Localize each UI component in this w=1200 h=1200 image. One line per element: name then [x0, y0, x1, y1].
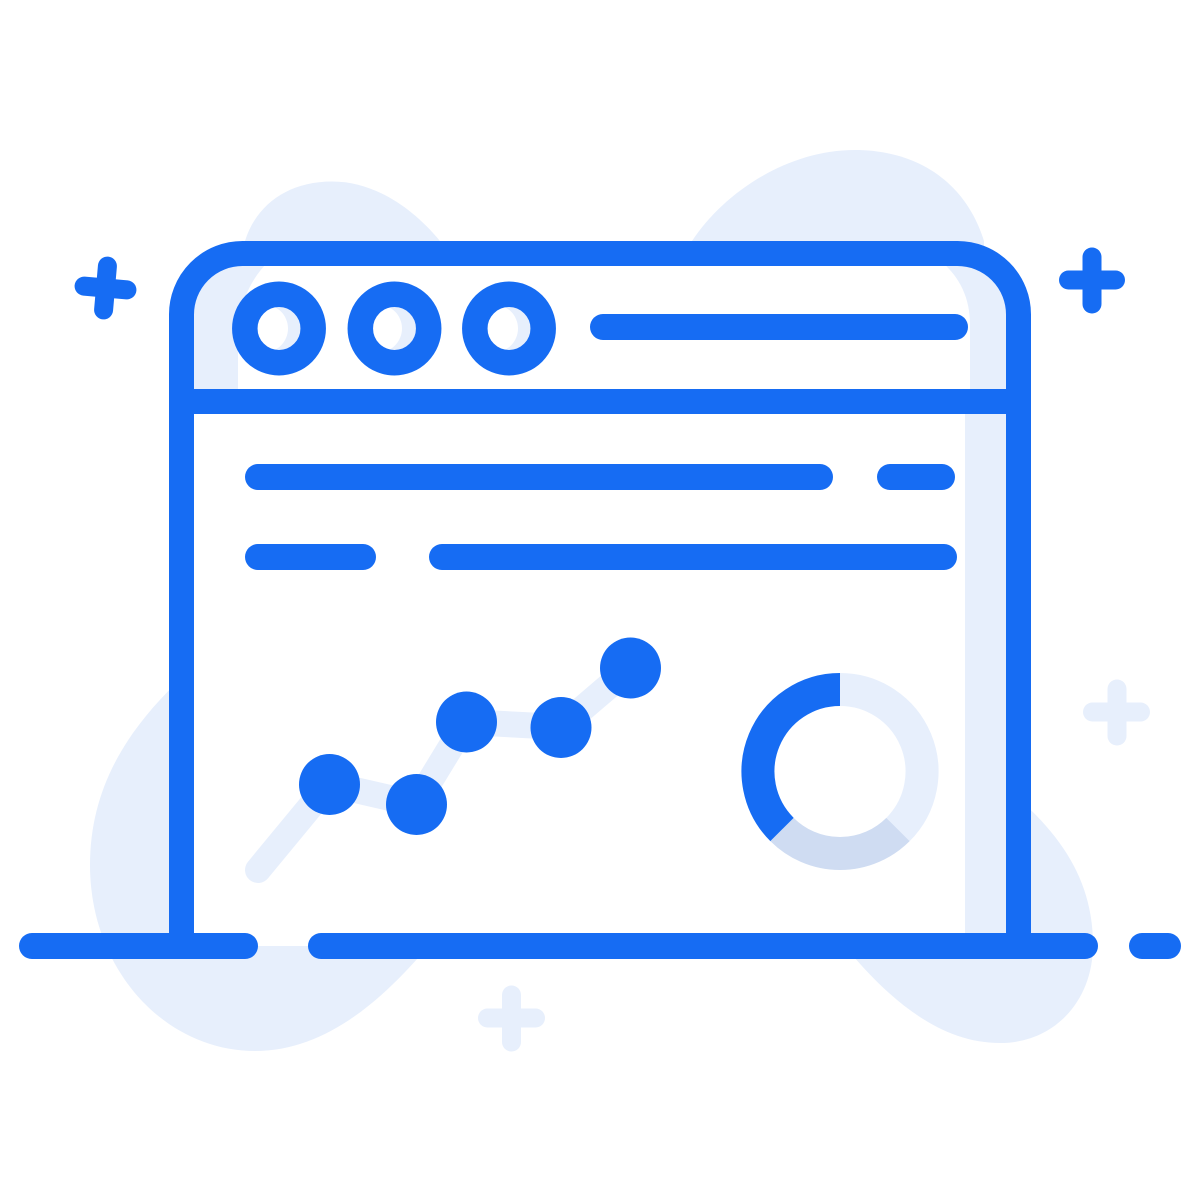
browser window frame [181, 253, 1019, 946]
button 3 [475, 294, 543, 363]
address bar [603, 314, 955, 340]
line 2 long [442, 544, 944, 570]
chart points [299, 638, 661, 835]
plus: top left [82, 264, 129, 312]
window interior [181, 253, 1019, 946]
donut segment: light [840, 690, 922, 830]
text placeholder lines [258, 327, 955, 557]
chart line [258, 668, 630, 870]
ground segment left [32, 933, 245, 959]
header divider [182, 389, 1018, 414]
plus: right light [1092, 689, 1140, 736]
donut chart [758, 690, 922, 854]
donut segment: blue [758, 690, 840, 830]
plus: top right [1068, 257, 1116, 304]
line 1 long [258, 464, 820, 490]
ground segment middle [321, 933, 1085, 959]
blob: top right [692, 150, 984, 300]
blob: bottom left [90, 675, 425, 1051]
button 2 [360, 294, 429, 363]
ground segment right [1142, 933, 1168, 959]
interior white body area [190, 405, 965, 946]
blob: top left [245, 182, 440, 300]
line 1 short [890, 464, 942, 490]
interior white header area [238, 262, 970, 395]
donut segment: medium [782, 830, 898, 854]
button 1 [245, 294, 313, 363]
interior tint [181, 253, 1019, 934]
window control buttons [245, 294, 543, 363]
window outline [181, 253, 1019, 946]
line chart [258, 638, 661, 870]
ground line [32, 933, 1168, 959]
window control crescents [240, 304, 532, 352]
blob: bottom right [848, 800, 1093, 1043]
background blobs [90, 150, 1093, 1051]
plus: bottom light [488, 995, 536, 1042]
line 2 short [258, 544, 363, 570]
